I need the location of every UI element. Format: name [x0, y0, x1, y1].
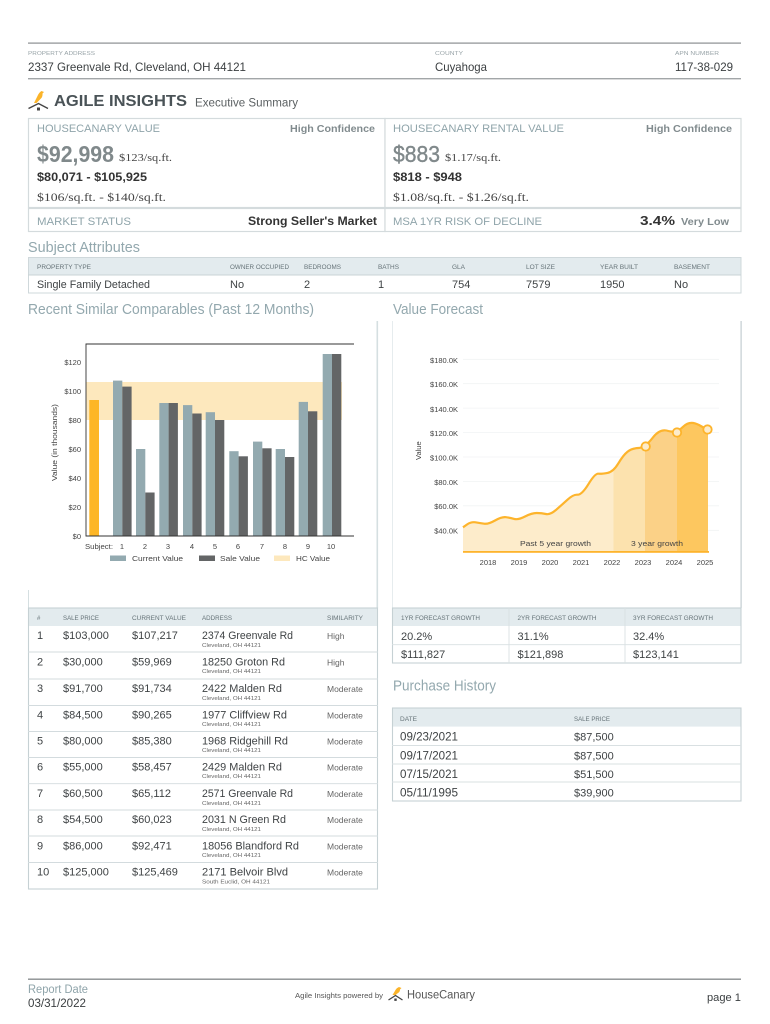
heading: purchase history: Purchase History — [393, 678, 497, 694]
heading: value forecast: Value Forecast — [393, 302, 483, 318]
table: subject attributes: 1950 — [600, 279, 624, 291]
y axis labels: Value (in thousands) — [50, 403, 59, 481]
row 5: 5 — [37, 736, 43, 748]
chart: comparables bar chart — [50, 344, 354, 563]
table header: SIMILARITY — [327, 616, 363, 622]
table: purchase history: DATE — [400, 717, 417, 723]
report date: 03/31/2022 — [28, 997, 86, 1010]
APN number — [675, 51, 733, 74]
row 2: Cleveland, OH 44121 — [202, 669, 261, 675]
table: forecast growth: $121,898 — [518, 649, 563, 661]
x axis labels: 2021 — [573, 558, 589, 567]
row 1: High — [327, 631, 345, 641]
row 1: 1 — [37, 630, 43, 642]
table: purchase history: $87,500 — [574, 750, 614, 762]
table: subject attributes: 754 — [452, 279, 470, 291]
panel: market status: MARKET STATUS — [37, 216, 131, 228]
row 6: Cleveland, OH 44121 — [202, 774, 261, 780]
row 8: $60,023 — [132, 814, 172, 826]
table: purchase history: 09/23/2021 — [400, 730, 458, 744]
row 4: Cleveland, OH 44121 — [202, 722, 261, 728]
x axis labels: 2 — [143, 542, 147, 551]
table: forecast growth: 20.2% — [401, 631, 432, 643]
table: purchase history: 05/11/1995 — [400, 786, 458, 800]
table: forecast growth: $123,141 — [633, 649, 679, 661]
row 2: $30,000 — [63, 656, 103, 668]
row 8: 8 — [37, 814, 43, 826]
y axis labels: $140.0K — [430, 405, 458, 414]
forecast line — [463, 423, 708, 527]
current value bars — [113, 354, 332, 536]
table: subject attributes: 1 — [378, 279, 384, 291]
x axis labels: 6 — [236, 542, 240, 551]
HC value band — [86, 382, 342, 420]
legend: HC Value — [296, 554, 330, 563]
icon: footer canary logo — [388, 987, 402, 1001]
row 6 — [37, 762, 363, 780]
y axis labels — [414, 356, 458, 536]
panel: MSA risk of decline: 3.4% — [640, 213, 676, 228]
table header: CURRENT VALUE — [132, 616, 186, 622]
row 4 — [37, 710, 363, 728]
table: purchase history — [392, 708, 741, 801]
row 1: Cleveland, OH 44121 — [202, 643, 261, 649]
legend: Sale Value — [220, 554, 260, 563]
table: subject attributes: BASEMENT — [674, 265, 710, 271]
panel: HouseCanary rental value: High Confidence — [646, 123, 732, 135]
y axis labels: $100.0K — [430, 454, 458, 462]
x axis labels: 9 — [306, 542, 310, 551]
row 1: $103,000 — [63, 630, 109, 642]
report date — [28, 984, 88, 1010]
panel: HouseCanary rental value: $818 - $948 — [393, 170, 462, 184]
y axis labels: $160.0K — [430, 380, 458, 389]
panel: MSA risk of decline: MSA 1YR RISK OF DECLINE — [393, 216, 542, 228]
row 10 — [37, 866, 363, 886]
x axis labels: 2023 — [635, 558, 651, 567]
panel: market status: Strong Seller's Market — [248, 216, 377, 228]
x axis labels: 1 — [120, 542, 124, 551]
row 8: Cleveland, OH 44121 — [202, 827, 261, 833]
table: forecast growth: 31.1% — [518, 631, 549, 643]
row 4: $84,500 — [63, 710, 103, 722]
y axis labels: $60.0K — [434, 502, 458, 511]
table: purchase history: 07/15/2021 — [400, 768, 458, 781]
row 9 — [37, 840, 363, 859]
row 6: 2429 Malden Rd — [202, 762, 282, 774]
table: subject attributes: LOT SIZE — [526, 265, 555, 271]
row 3: 2422 Malden Rd — [202, 683, 282, 695]
row 2: High — [327, 658, 345, 668]
rental value: $883 — [393, 141, 440, 167]
logo wordmark: AGILE INSIGHTS — [54, 93, 187, 110]
footer — [28, 978, 741, 1010]
row 1 — [37, 630, 345, 649]
county — [435, 51, 487, 74]
panel frame: comparables chart — [28, 321, 378, 608]
growth period labels: Past 5 year growth — [520, 539, 591, 548]
row 5: 1968 Ridgehill Rd — [202, 736, 288, 748]
table: forecast growth: 1YR FORECAST GROWTH — [401, 616, 480, 622]
table: subject attributes: PROPERTY TYPE — [37, 265, 91, 271]
row 4: $90,265 — [132, 710, 172, 722]
row 10: $125,469 — [132, 866, 178, 878]
row 6: 6 — [37, 762, 43, 774]
row 10: $125,000 — [63, 866, 109, 878]
table: purchase history: $39,900 — [574, 788, 614, 800]
row 6: $55,000 — [63, 762, 103, 774]
y axis labels: $40.0K — [434, 526, 458, 536]
report date: Report Date — [28, 984, 88, 996]
row 3: Moderate — [327, 684, 363, 694]
panel: HouseCanary value: $106/sq.ft. - $140/sq.ft. — [37, 190, 166, 204]
row 7: Cleveland, OH 44121 — [202, 801, 261, 807]
y axis labels: $120 — [64, 358, 81, 367]
row 3: $91,734 — [132, 683, 172, 695]
legend: Current Value — [132, 554, 183, 563]
y axis labels: $180.0K — [430, 356, 458, 365]
report title with logo — [28, 91, 298, 110]
row 5: Moderate — [327, 736, 363, 746]
row 8: Moderate — [327, 815, 363, 825]
row 9: Moderate — [327, 842, 363, 852]
row 6: $58,457 — [132, 762, 172, 774]
y axis labels: $40 — [68, 474, 81, 483]
panel: HouseCanary value: $123/sq.ft. — [119, 153, 172, 164]
icon: canary on house — [28, 91, 48, 110]
county: Cuyahoga — [435, 60, 487, 74]
row 8: $54,500 — [63, 814, 103, 826]
y axis labels: Value — [414, 441, 423, 460]
property address: PROPERTY ADDRESS — [28, 51, 95, 57]
subject bar — [89, 400, 99, 536]
y axis labels: $20 — [68, 503, 81, 512]
panel: HouseCanary rental value: $1.08/sq.ft. - $1.26/sq.ft. — [393, 190, 529, 204]
x axis labels: 4 — [190, 542, 194, 551]
panel: MSA risk of decline: Very Low — [681, 216, 730, 228]
panel: MSA risk of decline — [385, 208, 741, 232]
table: subject attributes: OWNER OCCUPIED — [230, 265, 290, 271]
row 10: 10 — [37, 866, 49, 878]
table: forecast growth: 3YR FORECAST GROWTH — [633, 616, 713, 622]
table: forecast growth: 2YR FORECAST GROWTH — [518, 616, 596, 622]
table: forecast growth — [392, 608, 741, 663]
x axis labels: 2022 — [604, 558, 620, 567]
x axis labels — [85, 542, 335, 551]
table: subject attributes: Single Family Detached — [37, 279, 150, 291]
APN number: 117-38-029 — [675, 60, 733, 74]
y axis labels: $80.0K — [434, 478, 458, 487]
header: property information — [28, 42, 741, 79]
table: subject attributes: No — [230, 279, 244, 291]
y axis labels: $100 — [64, 387, 81, 396]
page number: page 1 — [707, 992, 741, 1004]
row 8: 2031 N Green Rd — [202, 814, 286, 826]
x axis labels: 5 — [213, 542, 217, 551]
row 1: 2374 Greenvale Rd — [202, 630, 293, 642]
x axis labels: 10 — [327, 542, 335, 551]
HouseCanary wordmark: HouseCanary — [407, 990, 475, 1002]
row 2: 18250 Groton Rd — [202, 656, 285, 668]
powered by text: Agile Insights powered by — [295, 993, 384, 1000]
panel: HouseCanary value: HOUSECANARY VALUE — [37, 123, 160, 135]
row 5: Cleveland, OH 44121 — [202, 748, 261, 754]
row 7: $65,112 — [132, 788, 171, 800]
row 3: $91,700 — [63, 683, 103, 695]
table header: SALE PRICE — [63, 616, 99, 622]
row 9: 18056 Blandford Rd — [202, 840, 299, 852]
x axis labels: 2019 — [511, 558, 527, 567]
row 9: $86,000 — [63, 840, 103, 852]
panel: HouseCanary value: $80,071 - $105,925 — [37, 170, 147, 184]
row 7: 7 — [37, 788, 43, 800]
grid lines — [463, 359, 719, 530]
y axis labels: $0 — [73, 532, 81, 541]
heading: recent comparables: Recent Similar Comparables (Past 12 Months) — [28, 302, 314, 318]
row 10: South Euclid, OH 44121 — [202, 880, 270, 886]
row 9: 9 — [37, 840, 43, 852]
county: COUNTY — [435, 51, 463, 57]
row 5: $85,380 — [132, 736, 172, 748]
property address — [28, 51, 246, 74]
forecast markers — [642, 425, 712, 451]
x axis labels: 2025 — [697, 558, 713, 567]
panel: HouseCanary rental value: $1.17/sq.ft. — [445, 153, 501, 164]
table: subject attributes: No — [674, 279, 688, 291]
x axis labels: Subject: — [85, 542, 113, 551]
table: subject attributes: BATHS — [378, 265, 399, 271]
row 5: $80,000 — [63, 736, 103, 748]
row 2: 2 — [37, 656, 43, 668]
growth period labels: 3 year growth — [631, 539, 683, 548]
panel: HouseCanary value — [28, 118, 385, 208]
row 2 — [37, 656, 345, 675]
table header: ADDRESS — [202, 616, 232, 622]
table header — [37, 616, 363, 622]
row 10: 2171 Belvoir Blvd — [202, 866, 288, 878]
row 5 — [37, 736, 363, 754]
growth period labels — [520, 539, 683, 548]
table: purchase history: 09/17/2021 — [400, 750, 458, 762]
row 6: Moderate — [327, 763, 363, 773]
table: forecast growth: $111,827 — [401, 649, 445, 661]
x axis labels: 3 — [166, 542, 170, 551]
row 3: 3 — [37, 683, 43, 695]
shaded growth areas — [463, 424, 708, 551]
table: comparables — [28, 608, 378, 889]
row 7 — [37, 788, 363, 807]
legend — [110, 554, 330, 563]
row 9: $92,471 — [132, 840, 172, 852]
row 4: 1977 Cliffview Rd — [202, 710, 287, 722]
x axis labels: 8 — [283, 542, 287, 551]
panel: HouseCanary rental value: HOUSECANARY RENTAL VALUE — [393, 123, 564, 135]
y axis labels — [50, 358, 81, 541]
table: subject attributes: YEAR BUILT — [600, 265, 638, 271]
table: subject attributes: 2 — [304, 279, 310, 291]
sale value bars — [122, 354, 341, 536]
y axis labels: $80 — [68, 416, 81, 425]
x axis labels: 2018 — [480, 558, 496, 567]
table: subject attributes: 7579 — [526, 279, 550, 291]
chart: value forecast area chart — [414, 356, 719, 567]
panel frame: forecast chart — [392, 321, 742, 608]
panel: market status — [28, 208, 385, 232]
row 3: Cleveland, OH 44121 — [202, 696, 261, 702]
row 7: 2571 Greenvale Rd — [202, 788, 293, 800]
x axis labels: 2024 — [666, 558, 682, 567]
table: purchase history: $51,500 — [574, 769, 614, 781]
x axis labels — [480, 558, 713, 567]
row 4: 4 — [37, 710, 43, 722]
row 7: Moderate — [327, 789, 363, 799]
APN number: APN NUMBER — [675, 51, 719, 57]
row 7: $60,500 — [63, 788, 103, 800]
table: purchase history: $87,500 — [574, 732, 614, 744]
x axis labels: 7 — [260, 542, 264, 551]
heading: subject attributes: Subject Attributes — [28, 240, 140, 256]
row 9: Cleveland, OH 44121 — [202, 853, 261, 859]
table: subject attributes — [28, 257, 741, 293]
row 1: $107,217 — [132, 630, 178, 642]
property address: 2337 Greenvale Rd, Cleveland, OH 44121 — [28, 60, 246, 74]
row 2: $59,969 — [132, 656, 172, 668]
table header: # — [37, 616, 41, 622]
table: subject attributes: GLA — [452, 265, 465, 271]
table: purchase history: SALE PRICE — [574, 717, 610, 723]
panel: HouseCanary rental value — [385, 118, 741, 208]
table: subject attributes: BEDROOMS — [304, 265, 341, 271]
row 8 — [37, 814, 363, 833]
row 10: Moderate — [327, 868, 363, 878]
row 4: Moderate — [327, 710, 363, 720]
subtitle: Executive Summary — [195, 98, 298, 110]
y axis labels: $60 — [68, 445, 81, 454]
row 3 — [37, 683, 363, 702]
main value: $92,998 — [37, 141, 114, 167]
panel: HouseCanary value: High Confidence — [290, 123, 375, 135]
table: forecast growth: 32.4% — [633, 631, 664, 643]
x axis labels: 2020 — [542, 558, 558, 567]
y axis labels: $120.0K — [430, 429, 458, 438]
